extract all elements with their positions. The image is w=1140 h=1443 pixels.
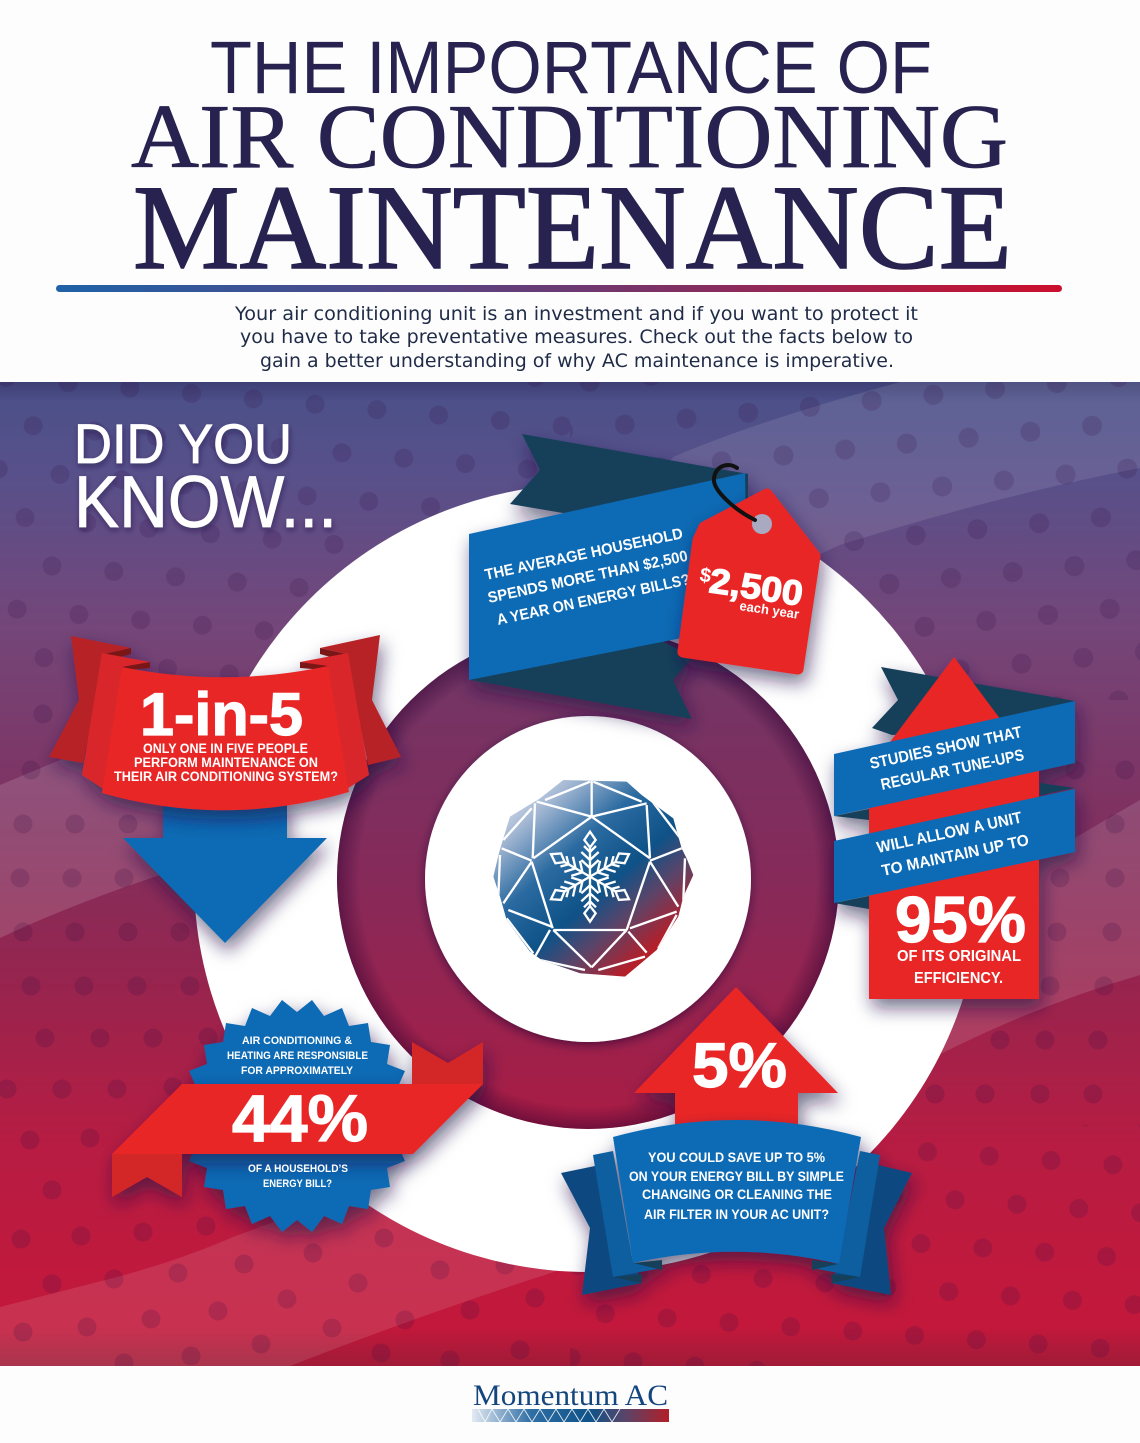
panel: energy bills ribbon and price tag xyxy=(469,434,815,719)
ribbon text: air filter: AIR FILTER IN YOUR AC UNIT? xyxy=(644,1206,829,1222)
ribbon text: air filter: YOU COULD SAVE UP TO 5% xyxy=(648,1149,825,1165)
ribbon text: 1-in-5: ONLY ONE IN FIVE PEOPLE xyxy=(143,741,308,756)
tag price: 2,500 xyxy=(707,561,806,614)
arrow: red up xyxy=(634,987,838,1140)
central ring xyxy=(194,484,982,1272)
ribbon text: tune-ups xyxy=(868,724,1031,880)
title: MAINTENANCE xyxy=(133,161,1012,295)
ribbon text: air filter: CHANGING OR CLEANING THE xyxy=(642,1186,832,1202)
icon: snowflake geodesic sphere xyxy=(493,780,694,977)
badge text: AIR CONDITIONING & xyxy=(242,1035,352,1047)
badge text: OF A HOUSEHOLD’S xyxy=(248,1163,348,1175)
background panel xyxy=(0,382,1140,1366)
intro text: gain a better understanding of why AC maintenance is imperative. xyxy=(260,350,894,372)
badge text: FOR APPROXIMATELY xyxy=(241,1065,354,1077)
ribbon: red banner xyxy=(49,635,401,810)
ribbon text: tune-ups: WILL ALLOW A UNIT xyxy=(875,809,1024,857)
stat: 95 percent: OF ITS ORIGINAL xyxy=(897,948,1021,965)
ribbon text: 1-in-5: THEIR AIR CONDITIONING SYSTEM? xyxy=(114,769,338,784)
intro text: Your air conditioning unit is an investment and if you want to protect it xyxy=(234,303,918,325)
starburst badge xyxy=(181,1000,413,1232)
ribbon text: tune-ups: TO MAINTAIN UP TO xyxy=(880,832,1031,880)
logo: Momentum AC: Momentum AC xyxy=(473,1379,668,1412)
badge text: 44% xyxy=(232,1081,368,1155)
panel: 44 percent xyxy=(112,1000,483,1232)
ribbon text: tune-ups: STUDIES SHOW THAT xyxy=(868,724,1024,773)
ribbon: blue banner xyxy=(561,1120,912,1295)
stat: 95 percent xyxy=(895,883,1026,987)
ribbon text: 1-in-5 xyxy=(114,681,338,784)
heading: did you know xyxy=(74,412,337,543)
ribbon text: air filter xyxy=(629,1031,844,1222)
ribbon text: energy bills: THE AVERAGE HOUSEHOLD xyxy=(483,525,684,584)
ribbon text: energy bills: A YEAR ON ENERGY BILLS? xyxy=(495,571,692,629)
ribbon: red banner xyxy=(112,1042,483,1197)
intro text xyxy=(234,303,918,372)
badge text: HEATING ARE RESPONSIBLE xyxy=(227,1050,368,1062)
panel: 95 percent xyxy=(834,657,1075,999)
stat: 95 percent: EFFICIENCY. xyxy=(914,970,1003,987)
ribbon text: energy bills: SPENDS MORE THAN $2,500 xyxy=(486,548,689,607)
tag price: each year xyxy=(739,598,801,622)
heading: did you know: KNOW... xyxy=(74,462,337,543)
ribbon text: energy bills xyxy=(483,525,692,629)
stat: 95 percent: 95% xyxy=(895,883,1026,956)
tag price: $ xyxy=(698,564,713,588)
heading: did you know: DID YOU xyxy=(74,412,292,475)
ribbon text: 1-in-5: 1-in-5 xyxy=(140,681,303,748)
ribbon text: 1-in-5: PERFORM MAINTENANCE ON xyxy=(134,755,318,770)
title xyxy=(131,26,1012,295)
panel: 1-in-5 xyxy=(49,635,401,943)
title: AIR CONDITIONING xyxy=(131,86,1008,187)
ribbon text: air filter: 5% xyxy=(692,1031,787,1101)
badge text: ENERGY BILL? xyxy=(263,1178,332,1190)
panel: 5 percent xyxy=(561,987,912,1295)
intro text: you have to take preventative measures. Check out the facts below to xyxy=(240,326,913,348)
badge text xyxy=(227,1035,368,1190)
ribbon text: air filter: ON YOUR ENERGY BILL BY SIMPLE xyxy=(629,1168,844,1184)
ribbon text: tune-ups: REGULAR TUNE-UPS xyxy=(879,747,1026,794)
title: THE IMPORTANCE OF xyxy=(210,26,932,109)
icon: price tag xyxy=(683,465,815,669)
